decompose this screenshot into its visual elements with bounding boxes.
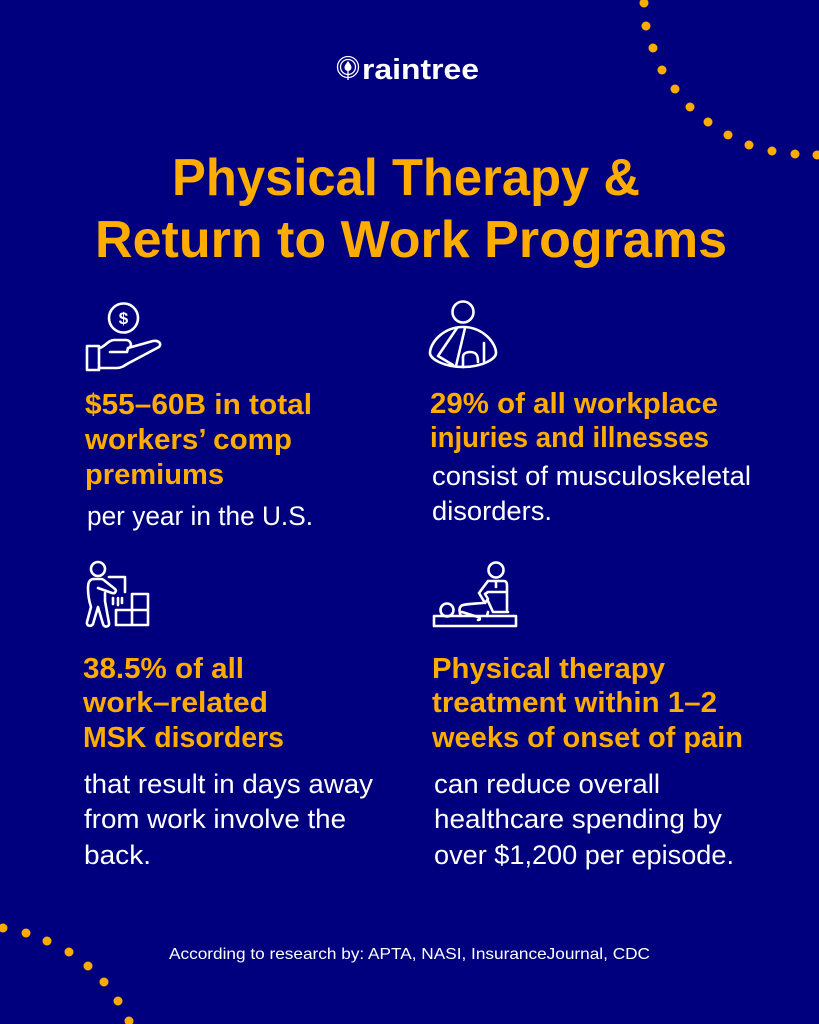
description [432, 461, 751, 526]
panel: early physical therapy [431, 562, 743, 870]
description: healthcare spending by [434, 804, 723, 834]
stat heading [431, 653, 743, 754]
icon: therapist treating patient [434, 562, 516, 626]
stat heading: MSK disorders [83, 722, 284, 754]
description: consist of musculoskeletal [432, 461, 751, 491]
stat heading: workers’ comp [84, 424, 292, 456]
stat heading: 29% of all workplace [430, 388, 718, 420]
footer: sources: According to research by: APTA, NASI, InsuranceJournal, CDC [169, 946, 650, 963]
stat heading: Physical therapy [432, 653, 665, 685]
stat heading: $55–60B in total [85, 389, 312, 421]
icon: person with arm sling [430, 302, 496, 367]
description: back. [84, 840, 151, 870]
stat heading: treatment within 1–2 [432, 687, 717, 719]
panel: musculoskeletal disorders [430, 302, 751, 526]
stat heading: weeks of onset of pain [431, 722, 743, 754]
panel: workers' comp premiums [84, 304, 313, 531]
stat heading: injuries and illnesses [430, 422, 709, 454]
description: that result in days away [84, 769, 374, 799]
title: Return to Work Programs [95, 211, 727, 269]
icon: hand holding coin: $ [119, 309, 129, 328]
description: disorders. [432, 496, 552, 526]
panel: back-related MSK disorders [82, 562, 374, 870]
title: Physical Therapy & [172, 149, 640, 207]
description [84, 769, 374, 870]
stat heading: premiums [85, 459, 224, 491]
description: from work involve the [84, 804, 346, 834]
description: over $1,200 per episode. [434, 840, 734, 870]
title [95, 149, 727, 269]
icon: worker stacking boxes [87, 562, 148, 627]
stat heading [82, 653, 284, 754]
logo: raintree: raintree [362, 54, 479, 86]
description: can reduce overall [434, 769, 660, 799]
stat heading [430, 388, 718, 454]
stat heading [84, 389, 312, 491]
description [434, 769, 734, 870]
description: per year in the U.S. [87, 501, 313, 531]
icon: hand holding coin [87, 304, 160, 370]
stat heading: work–related [82, 687, 268, 719]
icon: raintree drop [338, 56, 358, 80]
stat heading: 38.5% of all [83, 653, 244, 685]
